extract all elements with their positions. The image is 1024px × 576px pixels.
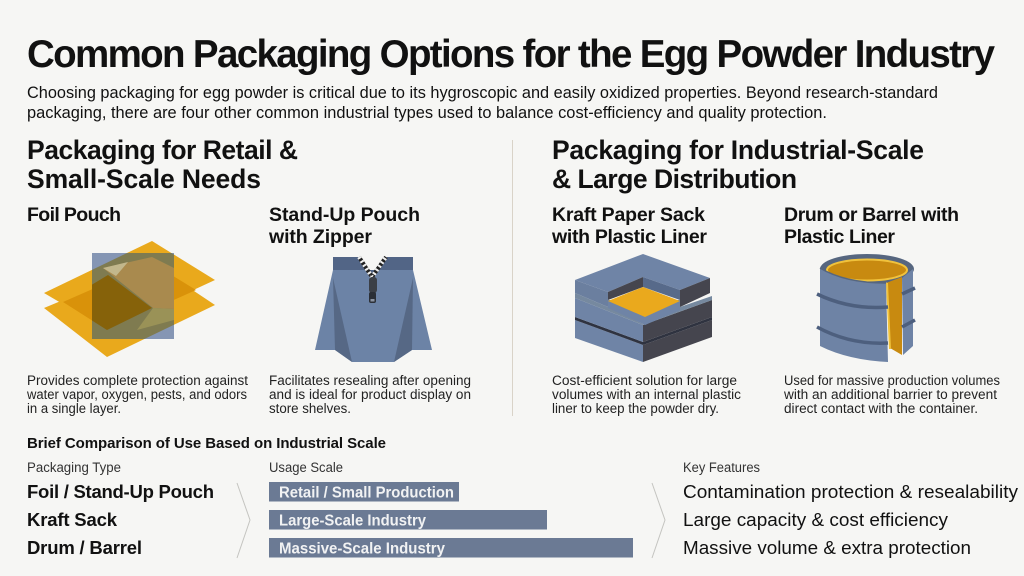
icon: drum with plastic liner [817,254,915,362]
icon: stand-up pouch with zipper [315,257,432,362]
kraft sack description: volumes with an internal plastic [552,387,741,402]
column: packaging type [27,460,214,558]
drum description: with an additional barrier to prevent [783,387,997,402]
column: packaging type: Kraft Sack [27,509,118,530]
drum description: Used for massive production volumes [784,373,1000,388]
intro text: packaging, there are four other common industrial types used to balance cost-efficiency and quality protection. [27,104,827,122]
title: Common Packaging Options for the Egg Powder Industry [27,33,996,76]
column: key features: Large capacity & cost efficiency [683,509,949,530]
drum heading [784,204,959,248]
heading: industrial: Packaging for Industrial-Scale [552,135,924,165]
column: usage scale bars: Usage Scale [269,460,343,475]
heading: industrial [552,135,924,194]
stand-up pouch description: and is ideal for product display on [269,387,471,402]
heading: industrial: & Large Distribution [552,164,797,194]
stand-up pouch description: Facilitates resealing after opening [269,373,471,388]
column: usage scale bars: Retail / Small Production [279,484,454,502]
foil pouch heading: Foil Pouch [27,204,121,226]
column: key features [683,460,1019,558]
column: usage scale bars: Massive-Scale Industry [279,540,445,558]
kraft sack heading: with Plastic Liner [551,226,707,248]
panel: retail and small-scale packaging [26,135,471,416]
panel: comparison table [27,435,1019,558]
foil pouch description: water vapor, oxygen, pests, and odors [26,387,247,402]
column: usage scale bars [269,460,633,558]
stand-up pouch heading [268,204,420,248]
drum description [783,373,1000,416]
column: packaging type: Packaging Type [27,460,121,475]
arrow: type to scale [237,483,250,558]
drum heading: Plastic Liner [784,226,895,248]
foil pouch description: in a single layer. [27,401,121,416]
drum heading: Drum or Barrel with [784,204,959,226]
column: usage scale bars: Large-Scale Industry [279,512,426,530]
foil pouch description: Provides complete protection against [27,373,248,388]
icon: kraft paper sack [575,254,712,362]
stand-up pouch heading: with Zipper [268,226,372,248]
stand-up pouch description [269,373,471,416]
icon: foil pouch [44,241,215,357]
column: packaging type: Foil / Stand-Up Pouch [27,481,214,502]
heading: retail: Small-Scale Needs [27,164,261,194]
heading: retail [27,135,298,194]
intro text [27,84,938,122]
column: key features: Massive volume & extra protection [683,537,971,558]
intro text: Choosing packaging for egg powder is critical due to its hygroscopic and easily oxidized properties. Beyond research-standard [27,84,938,102]
kraft sack heading [551,204,707,248]
drum description: direct contact with the container. [784,401,978,416]
foil pouch description [26,373,248,416]
kraft sack description: Cost-efficient solution for large [552,373,737,388]
panel: industrial-scale packaging [551,135,1000,416]
kraft sack heading: Kraft Paper Sack [552,204,705,226]
stand-up pouch heading: Stand-Up Pouch [269,204,420,226]
stand-up pouch description: store shelves. [269,401,351,416]
column: key features: Contamination protection & resealability [683,481,1019,502]
comparison heading: Brief Comparison of Use Based on Industrial Scale [27,435,386,452]
kraft sack description: liner to keep the powder dry. [552,401,719,416]
heading: retail: Packaging for Retail & [27,135,298,165]
column: packaging type: Drum / Barrel [27,537,142,558]
column: key features: Key Features [683,460,760,475]
kraft sack description [552,373,741,416]
arrow: scale to features [652,483,665,558]
